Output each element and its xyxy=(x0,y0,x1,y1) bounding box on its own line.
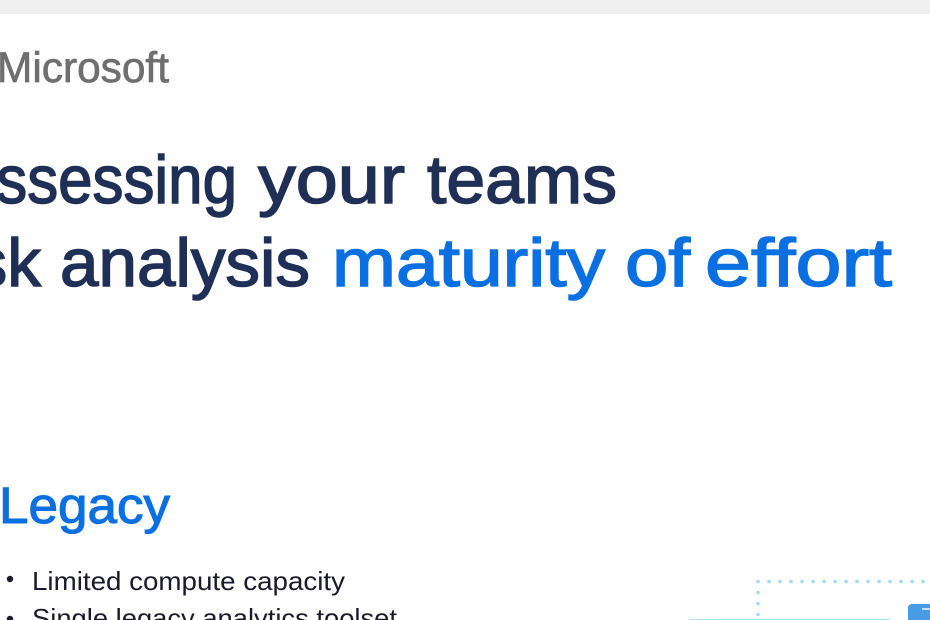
title line 2: maturity xyxy=(332,225,605,301)
title line 2: analysis xyxy=(60,225,310,301)
logo wordmark: Microsoft: Microsoft xyxy=(0,44,169,92)
bullet 2 xyxy=(7,616,13,620)
bullet 1 text: Limited compute capacity xyxy=(32,566,345,596)
cyan panel top edge xyxy=(690,619,890,620)
title line 1: teams xyxy=(427,142,617,218)
title line 2: of xyxy=(625,225,690,301)
title xyxy=(0,142,892,301)
dotted connector xyxy=(758,582,930,616)
title line 2 xyxy=(0,225,892,301)
title line 1 xyxy=(0,142,617,218)
title line 2: effort xyxy=(705,225,892,301)
bullet list xyxy=(7,566,398,620)
section heading: Legacy: Legacy xyxy=(0,477,171,534)
title line 1: your xyxy=(258,142,405,218)
bullet 1 xyxy=(7,576,13,582)
blue tile icon xyxy=(908,604,930,620)
top grey browser bar xyxy=(0,0,930,14)
